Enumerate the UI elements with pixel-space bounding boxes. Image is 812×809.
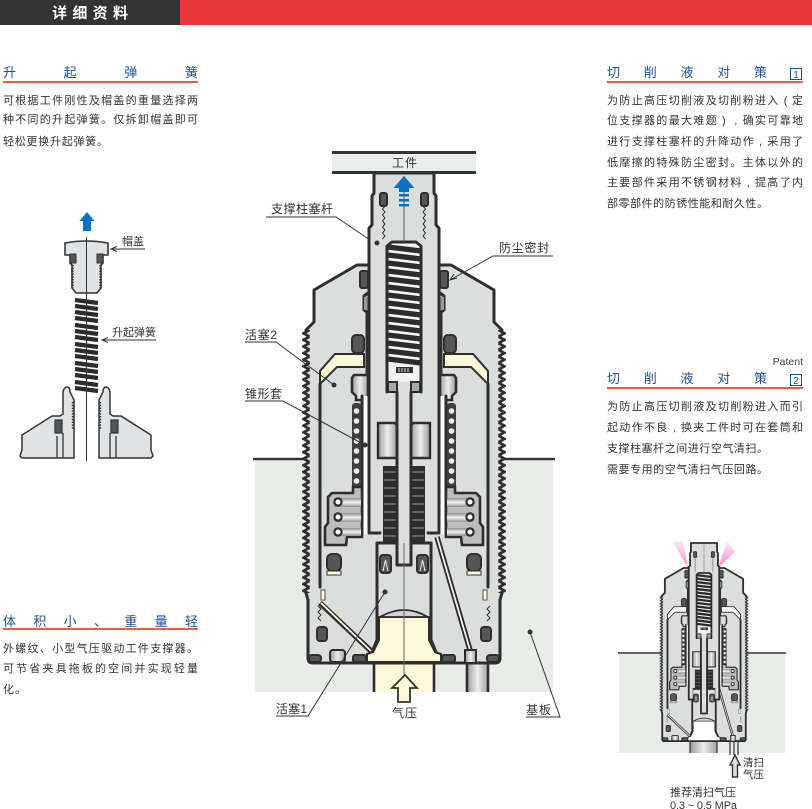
- label: piston 1: 活塞1: [276, 701, 307, 716]
- icon: number box 2: 2: [793, 376, 799, 387]
- small cylinder body: [660, 568, 748, 741]
- text block: compact and light: 化。: [3, 682, 26, 696]
- heading: coolant measures 2: 切削液对策: [607, 371, 767, 386]
- text block: lift spring: 可根据工件刚性及帽盖的重量选择两: [3, 93, 198, 107]
- icon: blue up arrow: [80, 212, 94, 231]
- label: dust seal: 防尘密封: [499, 240, 549, 255]
- diagram: lift spring exploded view: [20, 212, 156, 461]
- icon: air pressure arrow: [392, 675, 417, 702]
- panel: light weight text: [3, 614, 198, 696]
- label: recommended pressure: [670, 785, 738, 809]
- label: dust seal: [450, 240, 553, 280]
- text block: coolant measures 1: [607, 93, 803, 210]
- text block: compact and light: [3, 641, 198, 696]
- label: piston 2: 活塞2: [245, 327, 277, 342]
- air inlet pipe: [374, 663, 434, 692]
- heading: lift spring: 升起弹簧: [3, 65, 198, 80]
- icon: number box 2: [790, 374, 802, 387]
- text block: coolant measures 2: 需要专用的空气清扫气压回路。: [607, 462, 768, 476]
- cylinder body: [302, 265, 506, 663]
- text block: lift spring: 轻松更换升起弹簧。: [3, 134, 108, 148]
- text block: coolant measures 1: 主要部件采用不锈钢材料,提高了内: [607, 175, 803, 189]
- label: cap: 帽盖: [122, 234, 144, 248]
- label: taper sleeve: [245, 387, 368, 448]
- text block: coolant measures 2: 起动作不良,换夹工件时可在套筒和: [607, 420, 803, 434]
- header title: 详细资料: [52, 4, 128, 22]
- label: purge air pressure: 清扫: [743, 756, 764, 769]
- icon: purge arrow: [730, 755, 740, 777]
- base plate: [253, 459, 555, 692]
- text block: compact and light: 可节省夹具拖板的空间并实现轻量: [3, 661, 198, 675]
- label: lift spring: 升起弹簧: [112, 325, 156, 339]
- text block: coolant measures 1: 进行支撑柱塞杆的升降动作,采用了: [607, 134, 803, 148]
- text block: coolant measures 2: 为防止高压切削液及切削粉进入而引: [607, 399, 803, 413]
- label: base plate: 基板: [526, 703, 551, 717]
- small pipes: [690, 741, 738, 755]
- heading: coolant measures 1: 切削液对策: [607, 65, 767, 80]
- plunger rod: [369, 173, 439, 565]
- icon: number box 1: [790, 68, 802, 81]
- text block: coolant measures 1: 为防止高压切削液及切削粉进入(定: [607, 93, 803, 107]
- icon: number box 1: 1: [793, 70, 799, 81]
- cap: [65, 241, 108, 293]
- small plunger rod: [689, 543, 719, 714]
- text block: compact and light: 外螺纹、小型气压驱动工件支撑器。: [3, 641, 198, 655]
- icon: blue up arrow with stripes: [394, 176, 414, 206]
- text block: coolant measures 1: 低摩擦的特殊防尘密封。主体以外的: [607, 155, 803, 169]
- text block: coolant measures 2: [607, 399, 803, 476]
- pink air blast left: [673, 541, 688, 568]
- label: cap: [111, 234, 145, 252]
- label: patent: Patent: [773, 356, 803, 368]
- text block: lift spring: [3, 93, 198, 148]
- small base plate: [618, 653, 786, 753]
- label: base plate: [526, 632, 560, 717]
- panel: coolant measures 2: [607, 356, 803, 476]
- pink air blast right: [718, 541, 735, 568]
- label: plunger rod: 支撑柱塞杆: [271, 201, 333, 216]
- base sleeve: [20, 387, 153, 458]
- label: taper sleeve: 锥形套: [245, 387, 282, 401]
- label: air pressure: 气压: [392, 705, 417, 720]
- header bar: [0, 0, 812, 25]
- diagram: small purge view: [618, 541, 786, 809]
- diagram: main cross-section: [245, 151, 560, 720]
- text block: coolant measures 1: 部零部件的防锈性能和耐久性。: [607, 196, 768, 210]
- text block: lift spring: 种不同的升起弹簧。仅拆卸帽盖即可: [3, 112, 198, 126]
- label: purge air pressure: 气压: [743, 768, 764, 781]
- label: lift spring: [102, 325, 156, 342]
- label: piston 1: [276, 590, 388, 716]
- text block: coolant measures 1: 位支撑器的最大难题),确实可靠地: [607, 113, 803, 127]
- label: recommended pressure: 推荐清扫气压: [670, 785, 736, 799]
- lift spring coil: [75, 300, 98, 391]
- panel: coolant measures 1: [607, 65, 803, 210]
- purge air pipe: [467, 663, 488, 692]
- workpiece: [332, 151, 476, 174]
- panel: lift spring text: [3, 65, 198, 148]
- workpiece: 工件: [392, 156, 417, 170]
- label: purge air pressure: [743, 756, 764, 781]
- heading: compact and light: 体积小、重量轻: [3, 614, 198, 629]
- label: plunger rod: [266, 201, 380, 246]
- label: piston 2: [245, 327, 336, 388]
- text block: coolant measures 2: 支撑柱塞杆之间进行空气清扫。: [607, 441, 768, 455]
